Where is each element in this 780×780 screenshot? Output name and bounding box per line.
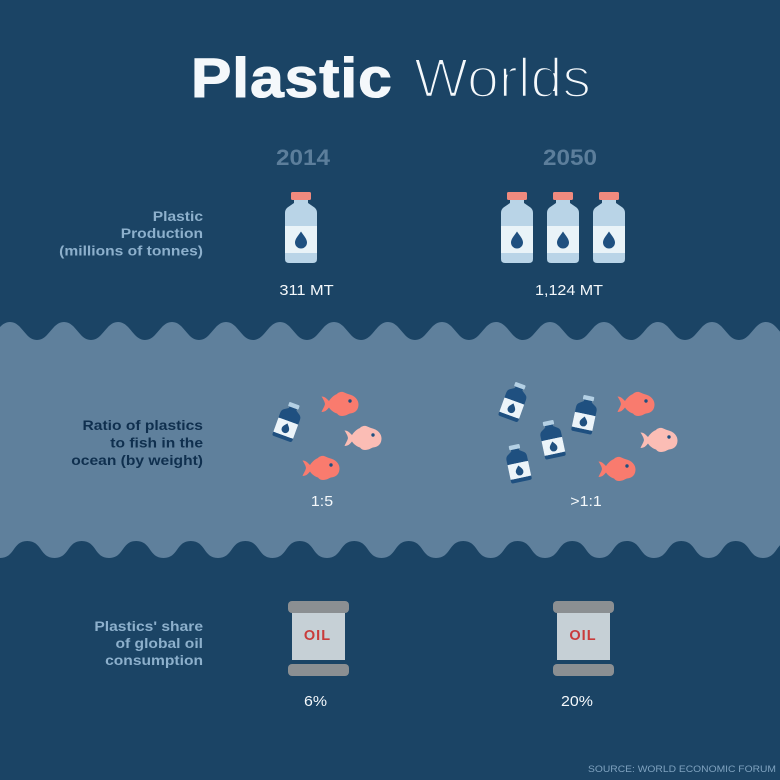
year heading: 2050: 2050 xyxy=(543,145,597,170)
icons: three fish 2050 xyxy=(598,392,678,481)
row label: ratio of plastics to fish: Ratio of plastics xyxy=(83,419,203,434)
value: 1,124 MT: 1,124 MT xyxy=(535,283,603,299)
value: 311 MT: 311 MT xyxy=(279,283,334,299)
row label: plastic production: Plastic xyxy=(153,210,203,225)
row label: plastic production: Production xyxy=(121,227,203,242)
title xyxy=(191,46,591,109)
icons: four small bottles xyxy=(498,380,599,484)
icons: three bottles 2050 xyxy=(501,192,625,263)
icon: oil barrel 2014 xyxy=(288,601,349,676)
icon: bottle 2014 xyxy=(285,192,317,263)
ocean band with wavy edges xyxy=(0,322,780,558)
value: 6%: 6% xyxy=(304,694,327,710)
source note: SOURCE: WORLD ECONOMIC FORUM xyxy=(588,764,776,775)
row label: share of oil consumption: Plastics' share xyxy=(94,620,203,635)
value: 20%: 20% xyxy=(561,694,593,710)
icons: 2050 plastics and fish xyxy=(498,380,678,484)
row label: ratio of plastics to fish: ocean (by weight) xyxy=(71,454,203,469)
icon: small bottle xyxy=(272,400,305,443)
icons: 2014 plastics and fish xyxy=(272,392,382,480)
row label: share of oil consumption: consumption xyxy=(105,654,203,669)
icon: oil barrel 2014: OIL xyxy=(304,628,331,644)
icon: oil barrel 2050: OIL xyxy=(569,628,597,644)
row label: plastic production: (millions of tonnes) xyxy=(59,244,203,259)
title: Plastic xyxy=(191,47,393,109)
value: 1:5: 1:5 xyxy=(311,494,333,510)
icons: three fish xyxy=(302,392,382,480)
year heading: 2014: 2014 xyxy=(276,145,331,170)
icon: oil barrel 2050 xyxy=(553,601,614,676)
row label: ratio of plastics to fish: to fish in the xyxy=(110,436,203,451)
title: Worlds xyxy=(414,46,591,109)
value: >1:1: >1:1 xyxy=(570,494,602,510)
row label: share of oil consumption: of global oil xyxy=(116,637,203,652)
